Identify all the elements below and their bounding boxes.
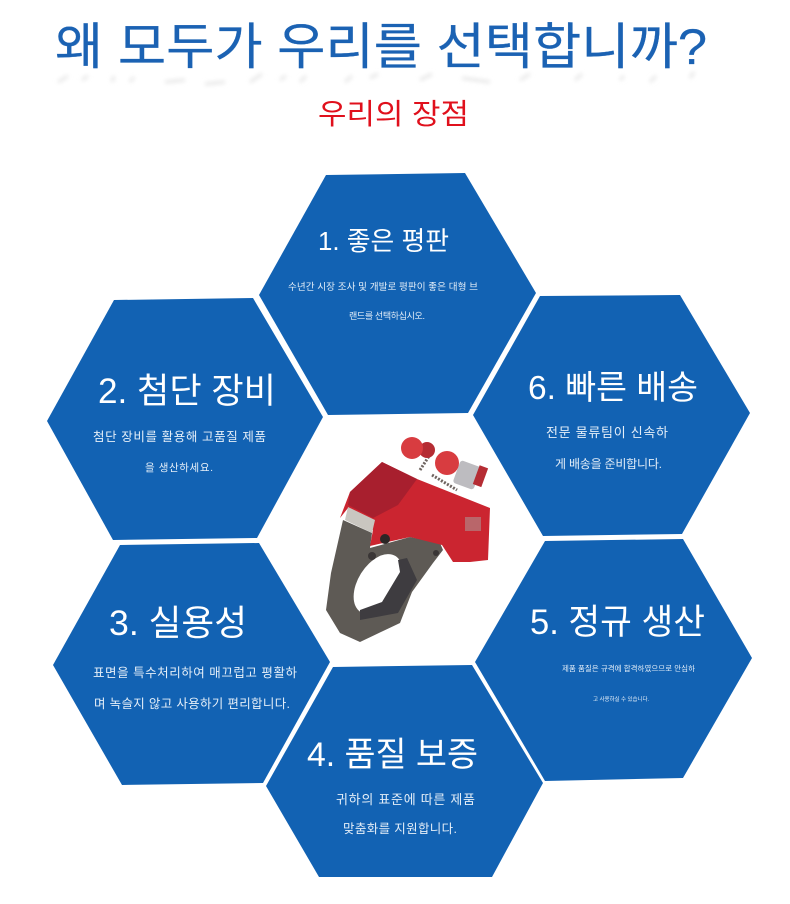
wrench dark steel arm <box>326 520 443 642</box>
heading 4: 4. 품질 보증 <box>307 736 478 774</box>
title reflection smudges <box>58 72 694 84</box>
icon: red hydraulic torque wrench <box>326 437 490 642</box>
wrench top face <box>348 462 417 518</box>
panel: 2 advanced equipment <box>47 298 323 540</box>
title: 왜 모두가 우리를 선택합니까? <box>55 19 707 75</box>
panel: 6 fast delivery: 게 배송을 준비합니다. <box>555 457 662 471</box>
panel: 6 fast delivery <box>473 295 750 536</box>
text 4: 귀하의 표준에 따른 제품 <box>336 792 475 807</box>
text 2: 첨단 장비를 활용해 고품질 제품 <box>93 430 266 444</box>
panel: 1 good reputation: 랜드를 선택하십시오. <box>349 311 425 321</box>
text 5: 제품 품질은 규격에 합격하였으므로 안심하 <box>562 663 695 673</box>
wrench chain <box>420 453 457 490</box>
panel: 2 advanced equipment: 을 생산하세요. <box>145 461 213 474</box>
panel: 3 practicality <box>53 543 330 785</box>
text 6: 전문 물류팀이 신속하 <box>546 425 668 440</box>
text 1: 수년간 시장 조사 및 개발로 평판이 좋은 대형 브 <box>288 281 478 293</box>
panel: 5 standard production: 고 사용하실 수 있습니다. <box>593 695 649 703</box>
wrench red body <box>340 462 490 562</box>
heading 6: 6. 빠른 배송 <box>528 370 698 407</box>
subtitle: 우리의 장점 <box>318 99 469 131</box>
heading 5: 5. 정규 생산 <box>530 603 705 642</box>
panel: 3 practicality: 며 녹슬지 않고 사용하기 편리합니다. <box>94 697 290 711</box>
panel: 1 good reputation <box>259 173 536 415</box>
wrench silver spool <box>453 460 481 490</box>
heading 1: 1. 좋은 평판 <box>318 226 449 256</box>
wrench ring opening <box>344 545 412 623</box>
heading 2: 2. 첨단 장비 <box>98 372 276 411</box>
wrench inner socket <box>360 558 417 620</box>
panel: 4 quality assurance <box>266 665 543 877</box>
wrench red caps <box>419 442 435 458</box>
panel: 4 quality assurance: 맞춤화를 지원합니다. <box>343 822 457 836</box>
heading 3: 3. 실용성 <box>109 603 247 643</box>
text 3: 표면을 특수처리하여 매끄럽고 평활하 <box>93 666 297 680</box>
panel: 5 standard production <box>475 539 752 781</box>
wrench grey plate <box>345 507 375 533</box>
